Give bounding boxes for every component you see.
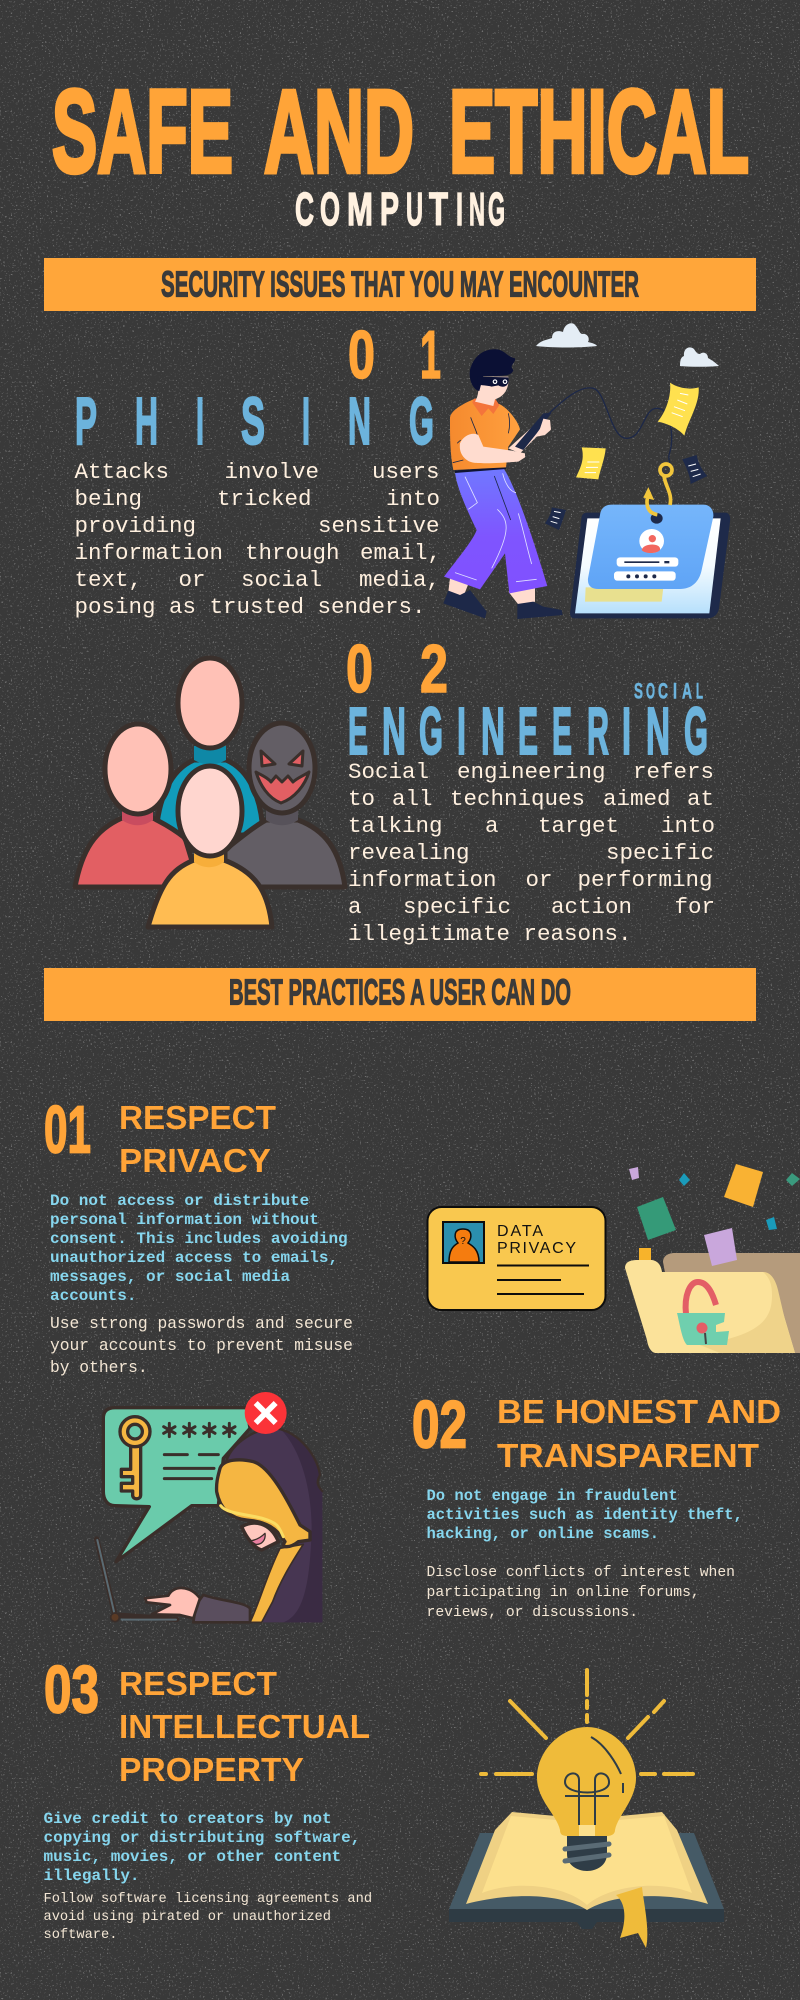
text: phising description: social [241, 567, 322, 593]
text: phising description: sensitive [318, 513, 440, 539]
text: social engineering description: performing [578, 867, 713, 893]
text: property highlight: illegally. [44, 1867, 140, 1885]
text: G [488, 183, 505, 235]
text: phising description: involve [224, 459, 319, 485]
heading: RESPECT [119, 1665, 277, 1702]
book [449, 1812, 724, 1929]
text: phising description [74, 459, 441, 620]
text: social engineering description: revealing [348, 840, 470, 866]
number 03: 03 [44, 1652, 99, 1728]
text: property highlight: copying or distributing software, [44, 1829, 360, 1847]
subtitle: O [320, 183, 340, 235]
heading: social: O [646, 678, 655, 704]
title [52, 66, 749, 198]
heading [497, 1393, 781, 1474]
text: privacy note: Use strong passwords and secure [50, 1314, 353, 1333]
number 01 [348, 317, 441, 393]
hood [227, 1428, 322, 1622]
text: G [684, 694, 708, 769]
text: phising description: email, [360, 540, 441, 566]
text: honesty highlight: activities such as identity theft, [426, 1506, 743, 1524]
text: social engineering description: for [674, 894, 715, 920]
text: social engineering description: into [661, 813, 715, 839]
icon: cloud small [680, 347, 719, 367]
sleeve [193, 1595, 250, 1622]
text: property note: software. [44, 1928, 117, 1943]
heading: RESPECT [119, 1099, 276, 1136]
heading: engineering: I [457, 694, 466, 769]
fish hook [644, 464, 672, 515]
teal person [156, 658, 263, 835]
icon: data privacy id card: ? [460, 1236, 466, 1247]
text: social engineering description: Social [348, 759, 429, 785]
text: social engineering description: to [348, 786, 375, 812]
key [120, 1417, 150, 1499]
icon: data privacy id card [428, 1207, 606, 1310]
heading: social [634, 678, 703, 704]
icon: folder with lock and flying papers [625, 1164, 800, 1353]
text: social engineering description: a [348, 894, 362, 920]
heading: social: A [682, 678, 692, 704]
face [242, 1523, 278, 1550]
subtitle [295, 183, 505, 235]
heading: phising: N [348, 384, 371, 459]
text: privacy highlight [50, 1192, 348, 1305]
subtitle: C [295, 183, 314, 235]
heading: engineering: E [552, 694, 572, 769]
text: phising description: or [178, 567, 206, 593]
heading [119, 1099, 276, 1179]
icon: data privacy id card: DATA [497, 1223, 543, 1240]
hand [145, 1588, 200, 1618]
heading: INTELLECTUAL [119, 1708, 370, 1745]
heading: engineering: I [622, 694, 631, 769]
text: privacy highlight: messages, or social media [50, 1268, 290, 1286]
text: social engineering description: refers [633, 759, 714, 785]
text: honesty note [426, 1565, 735, 1621]
text: phising description: posing as trusted senders. [74, 594, 426, 620]
text: social engineering description: techniques [450, 786, 585, 812]
text: G [409, 384, 434, 459]
number 02: 2 [420, 631, 448, 707]
text: honesty highlight: Do not engage in fraudulent [426, 1487, 678, 1505]
text: property note: avoid using pirated or unauthorized [44, 1910, 331, 1925]
number 01: 1 [420, 317, 441, 393]
paper scraps [545, 383, 707, 530]
heading: social: I [673, 678, 677, 704]
speech bubble [103, 1408, 250, 1562]
banner: best practices [44, 968, 756, 1021]
text: phising description: providing [74, 513, 196, 539]
text: social engineering description: talking [348, 813, 443, 839]
icon: cloud large [536, 323, 597, 348]
impostor person [225, 723, 345, 887]
heading: PRIVACY [119, 1142, 271, 1179]
heading: BE HONEST AND [497, 1393, 781, 1430]
heading: engineering: E [348, 694, 368, 769]
heading: PROPERTY [119, 1751, 304, 1788]
laptop [97, 1539, 177, 1622]
heading: engineering: E [518, 694, 538, 769]
text: phising description: text, [74, 567, 142, 593]
text: honesty highlight: hacking, or online scams. [426, 1525, 659, 1543]
heading [119, 1665, 370, 1788]
heading: phising: S [241, 384, 265, 459]
text: social engineering description: information [348, 867, 497, 893]
scarf [250, 1544, 303, 1622]
text: phising description: information [74, 540, 223, 566]
login card [570, 505, 730, 618]
light rays [481, 1670, 693, 1774]
heading: social: L [696, 678, 703, 704]
text: property highlight: music, movies, or other content [44, 1848, 341, 1866]
text: privacy highlight: Do not access or distribute [50, 1192, 309, 1210]
number 02: 0 [346, 631, 373, 707]
number 02 [346, 631, 448, 707]
text: social engineering description: action [551, 894, 632, 920]
text: privacy note: your accounts to prevent misuse [50, 1336, 353, 1355]
illustration: phishing hacker with fishing rod [443, 349, 730, 619]
subtitle: I [456, 183, 463, 235]
text: property note: Follow software licensing agreements and [44, 1892, 372, 1907]
heading: phising: I [196, 384, 204, 459]
text: honesty highlight [426, 1487, 743, 1543]
text: honesty note: Disclose conflicts of interest when [426, 1565, 735, 1581]
text: honesty note: participating in online forums, [426, 1585, 700, 1601]
red person [75, 724, 200, 887]
heading: social: C [658, 678, 668, 704]
subtitle: T [429, 183, 448, 235]
text: social engineering description: specific [606, 840, 714, 866]
number 01: 0 [348, 317, 375, 393]
heading: phising [75, 384, 434, 459]
text: phising description: media, [359, 567, 440, 593]
text: social engineering description: illegitimate reasons. [348, 921, 632, 947]
section: respect intellectual property [44, 1652, 372, 1943]
icon: data privacy id card: PRIVACY [497, 1240, 576, 1257]
subtitle: N [469, 183, 485, 235]
text: social engineering description: engineering [457, 759, 606, 785]
heading: engineering: N [382, 694, 406, 769]
heading: phising: P [75, 384, 97, 459]
banner: security issues [44, 258, 756, 311]
text: property note [44, 1892, 372, 1943]
text: social engineering description: a [485, 813, 499, 839]
heading: TRANSPARENT [497, 1437, 759, 1474]
subtitle: M [347, 183, 373, 235]
heading: social: S [634, 678, 643, 704]
text: social engineering description: aimed [603, 786, 671, 812]
text: phising description: into [386, 486, 440, 512]
phishing line [548, 388, 672, 463]
heading: phising: I [302, 384, 310, 459]
text: social engineering description: specific [403, 894, 511, 920]
alert badge [245, 1392, 287, 1434]
text: phising description: being [74, 486, 142, 512]
illustration: light bulb on open book [449, 1670, 724, 1948]
heading: engineering: G [419, 694, 443, 769]
heading: engineering: N [646, 694, 670, 769]
text: phising description: through [245, 540, 340, 566]
heading: engineering: N [481, 694, 505, 769]
text: privacy note [50, 1314, 353, 1377]
password asterisks and lines [164, 1423, 235, 1479]
section: be honest and transparent [412, 1388, 781, 1621]
bulb [537, 1727, 636, 1871]
text: privacy note: by others. [50, 1358, 148, 1377]
text: property highlight [44, 1810, 360, 1885]
text: social engineering description [348, 759, 715, 947]
text: phising description: Attacks [74, 459, 169, 485]
subtitle: U [406, 183, 423, 235]
person [443, 349, 563, 619]
text: privacy highlight: consent. This includes avoiding [50, 1230, 348, 1248]
subtitle: P [380, 183, 399, 235]
number 01: 01 [44, 1092, 91, 1168]
text: privacy highlight: unauthorized access to emails, [50, 1249, 338, 1267]
heading: phising: H [135, 384, 158, 459]
text: property highlight: Give credit to creators by not [44, 1810, 332, 1828]
bookmark [616, 1887, 647, 1948]
section: respect privacy [44, 1092, 353, 1377]
illustration: group of people with impostor [75, 658, 345, 927]
scarf highlight [221, 1506, 283, 1537]
title: SAFE [52, 66, 233, 198]
hood scarf [217, 1460, 310, 1547]
title: AND [264, 66, 414, 198]
text: privacy highlight: personal information without [50, 1211, 319, 1229]
text: honesty note: reviews, or discussions. [426, 1605, 638, 1621]
text: phising description: users [372, 459, 440, 485]
text: social engineering description: target [538, 813, 619, 839]
text: social engineering description: or [526, 867, 553, 893]
text: phising description: tricked [217, 486, 312, 512]
text: social engineering description: at [687, 786, 714, 812]
heading: engineering [348, 694, 708, 769]
illustration: hooded hacker stealing password [97, 1392, 322, 1622]
heading: engineering: R [587, 694, 609, 769]
yellow person [148, 766, 272, 927]
text: privacy highlight: accounts. [50, 1287, 136, 1305]
number 02: 02 [412, 1388, 467, 1462]
text: social engineering description: all [392, 786, 433, 812]
